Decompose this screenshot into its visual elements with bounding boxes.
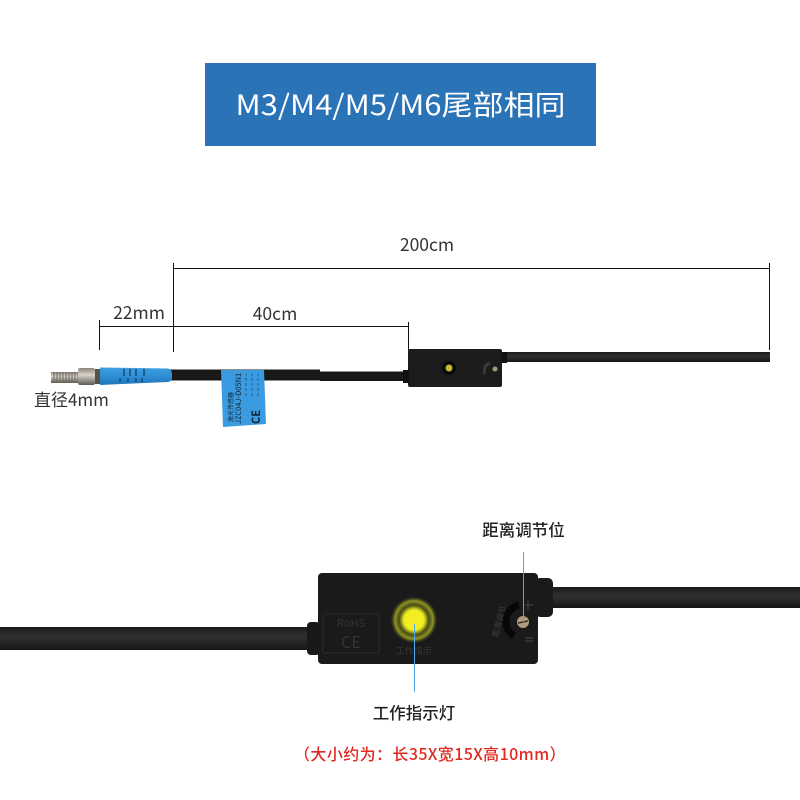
right strain relief xyxy=(535,578,553,617)
sensor overview xyxy=(51,349,770,427)
enlarged sensor detail xyxy=(0,573,800,664)
left cable xyxy=(0,627,310,650)
adjustment dial: 距离调节 xyxy=(490,604,509,638)
threaded probe tip xyxy=(51,368,101,385)
cable: tail xyxy=(500,352,770,362)
RoHS CE stamp: CE xyxy=(341,629,361,653)
cable: probe to amplifier xyxy=(170,370,408,381)
blue sleeve xyxy=(100,368,172,385)
leader line: indicator lamp xyxy=(414,624,416,692)
size note: （大小约为：长35X宽15X高10mm） xyxy=(294,741,566,765)
dimension: 22mm xyxy=(100,300,173,350)
leader line: distance adjuster xyxy=(522,552,524,622)
label: distance adjuster: 距离调节位 xyxy=(482,517,565,541)
blue cable tag: JZC04J-D05N1 xyxy=(233,373,244,424)
RoHS CE stamp: RoHS xyxy=(337,615,365,631)
adjustment dial xyxy=(490,600,533,641)
dimension: 40cm xyxy=(173,301,408,350)
blue cable tag xyxy=(221,370,266,427)
title text: M3/M4/M5/M6尾部相同 xyxy=(236,84,566,124)
lamp caption: 工作指示 xyxy=(396,644,432,657)
label: indicator lamp: 工作指示灯 xyxy=(373,700,455,724)
indicator lamp xyxy=(390,596,438,644)
blue cable tag: 激光传感器 xyxy=(226,392,235,422)
dimension: 200cm: 200cm xyxy=(400,232,454,257)
RoHS CE stamp xyxy=(323,614,379,653)
dimension: 40cm: 40cm xyxy=(253,301,297,326)
left strain relief xyxy=(307,622,320,655)
blue cable tag: CE xyxy=(248,410,264,424)
diameter label: 直径4mm xyxy=(34,386,109,411)
right cable xyxy=(550,587,800,608)
amplifier box xyxy=(403,349,507,387)
dimension: 22mm: 22mm xyxy=(113,300,165,325)
dimension: 200cm xyxy=(173,232,770,352)
title banner xyxy=(205,63,596,146)
amplifier body xyxy=(318,573,538,664)
